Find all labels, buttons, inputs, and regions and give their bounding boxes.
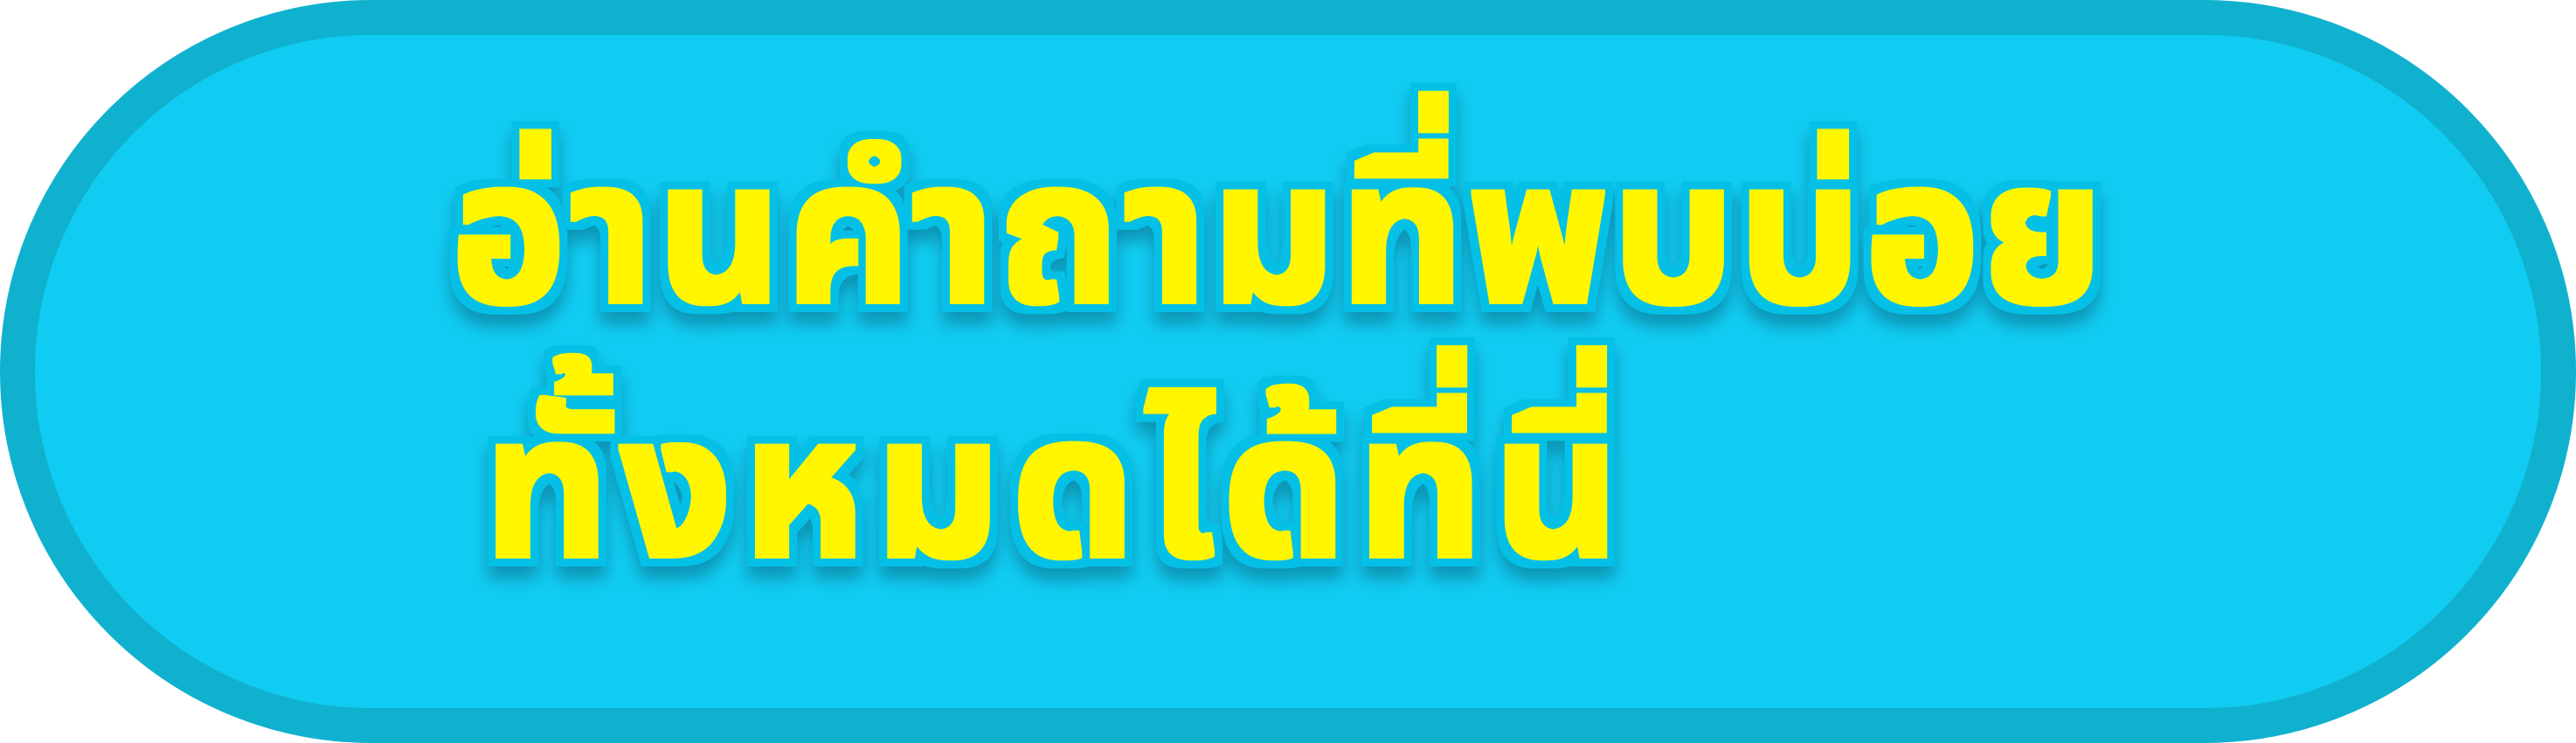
heading line 1: อ่านคำถามที่พบบ่อย bbox=[451, 94, 2107, 344]
button heading text bbox=[451, 94, 2107, 599]
heading line 2: ทั้งหมดได้ที่นี่ bbox=[483, 348, 1631, 599]
